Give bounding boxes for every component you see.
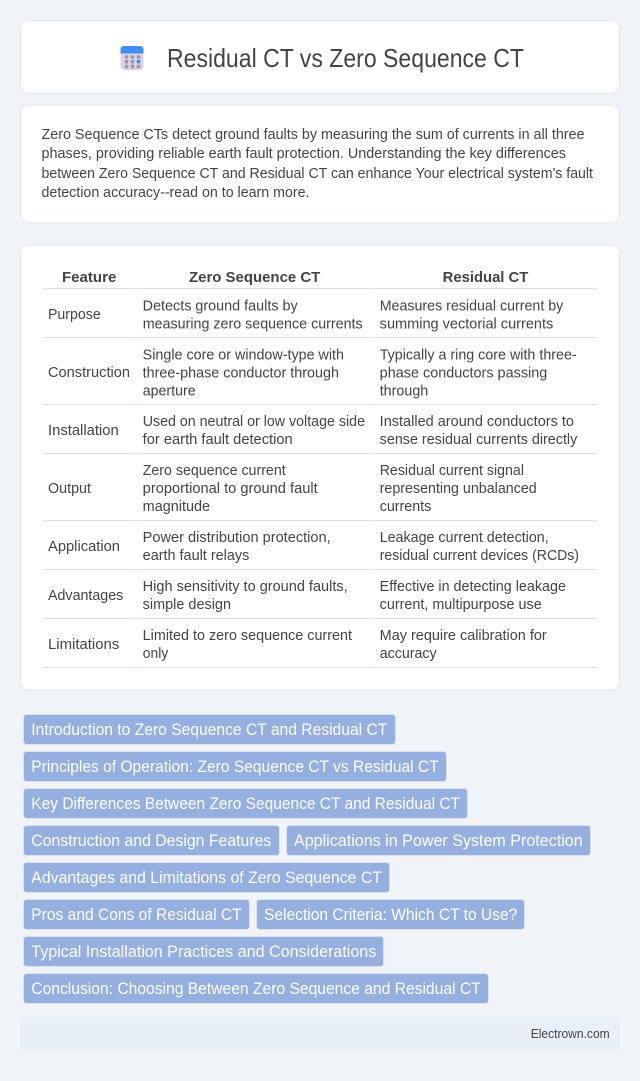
footer brand text: Electrown.com: [531, 1026, 610, 1041]
table row: application: earth fault relays: [143, 548, 249, 564]
button: applications: [286, 826, 590, 856]
table row: output: proportional to ground fault: [143, 481, 318, 497]
button: typical installation: [24, 936, 384, 966]
table row: construction: phase conductors passing: [380, 366, 547, 382]
table row: installation: Used on neutral or low voltage side: [143, 414, 365, 430]
text block: introduction paragraph: Zero Sequence CTs detect ground faults by measuring the sum of currents in all three: [42, 127, 584, 143]
table row: advantages: simple design: [143, 597, 231, 613]
button: pros and cons: Pros and Cons of Residual CT: [31, 906, 242, 924]
table row: output: Output: [48, 481, 91, 497]
table row: application: [43, 530, 597, 570]
panel: introduction: [20, 105, 620, 223]
table row: purpose: Measures residual current by: [380, 298, 564, 314]
table row: application: Application: [48, 539, 120, 555]
button: advantages and limitations: [24, 862, 390, 892]
button: introduction: Introduction to Zero Sequence CT and Residual CT: [31, 721, 387, 739]
table row: installation: for earth fault detection: [143, 432, 293, 448]
table row: advantages: Effective in detecting leakage: [380, 579, 566, 595]
table row: limitations: [43, 628, 597, 668]
table row: construction: through: [380, 384, 428, 400]
button: typical installation: Typical Installation Practices and Considerations: [31, 943, 376, 961]
table row: limitations: accuracy: [380, 646, 438, 662]
table header row: [43, 270, 597, 289]
table row: purpose: Detects ground faults by: [143, 298, 299, 314]
text block: introduction paragraph: between Zero Sequence CT and Residual CT can enhance Your electrical system's fault: [42, 166, 593, 182]
table row: purpose: [43, 298, 597, 338]
table row: application: Power distribution protection,: [143, 530, 331, 546]
table row: installation: [43, 414, 597, 454]
table row: installation: Installation: [48, 423, 119, 439]
title: Residual CT vs Zero Sequence CT: [167, 45, 524, 73]
table row: construction: [43, 348, 597, 405]
topic link buttons: [24, 714, 590, 1004]
button: construction and design: Construction and Design Features: [31, 832, 271, 850]
table row: advantages: current, multipurpose use: [380, 597, 542, 613]
panel: comparison table: [20, 245, 620, 690]
table row: application: Leakage current detection,: [380, 530, 549, 546]
footer: [20, 1017, 620, 1051]
table row: construction: Construction: [48, 365, 130, 381]
text block: introduction paragraph: phases, providing reliable earth fault protection. Understanding the key differences: [42, 146, 566, 162]
table header row: Zero Sequence CT: [189, 270, 320, 286]
table row: purpose: Purpose: [48, 307, 101, 323]
table header row: Residual CT: [443, 270, 528, 286]
table header row: Feature: [62, 270, 116, 286]
table row: output: currents: [380, 499, 431, 515]
button: advantages and limitations: Advantages and Limitations of Zero Sequence CT: [31, 869, 382, 887]
table row: construction: Typically a ring core with three-: [380, 348, 577, 364]
table row: application: residual current devices (RCDs): [380, 548, 579, 564]
table row: output: representing unbalanced: [380, 481, 537, 497]
button: key differences: Key Differences Between Zero Sequence CT and Residual CT: [31, 795, 460, 813]
table row: limitations: only: [143, 646, 169, 662]
table row: installation: Installed around conductors to: [380, 414, 574, 430]
button: applications: Applications in Power System Protection: [294, 832, 583, 850]
table row: purpose: summing vectorial currents: [380, 316, 553, 332]
table row: output: Zero sequence current: [143, 463, 286, 479]
button: principles of operation: [24, 752, 446, 782]
table row: purpose: measuring zero sequence currents: [143, 316, 363, 332]
button: conclusion: [24, 974, 488, 1004]
table row: limitations: May require calibration for: [380, 628, 547, 644]
button: selection criteria: Selection Criteria: Which CT to Use?: [264, 906, 517, 924]
button: pros and cons: [24, 900, 250, 930]
table row: construction: aperture: [143, 384, 196, 400]
table row: construction: three-phase conductor through: [143, 366, 339, 382]
button: principles of operation: Principles of Operation: Zero Sequence CT vs Residual CT: [31, 758, 439, 776]
button: key differences: [24, 788, 468, 818]
table row: limitations: Limitations: [48, 637, 119, 653]
table row: advantages: [43, 579, 597, 619]
table row: advantages: High sensitivity to ground faults,: [143, 579, 348, 595]
table row: limitations: Limited to zero sequence current: [143, 628, 352, 644]
table row: installation: sense residual currents directly: [380, 432, 578, 448]
button: construction and design: [24, 826, 280, 856]
button: conclusion: Conclusion: Choosing Between Zero Sequence and Residual CT: [31, 980, 481, 998]
icon: calendar grid: [120, 46, 144, 70]
table row: output: Residual current signal: [380, 463, 524, 479]
table row: output: [43, 463, 597, 521]
table row: construction: Single core or window-type with: [143, 348, 344, 364]
table row: advantages: Advantages: [48, 588, 123, 604]
table row: output: magnitude: [143, 499, 210, 515]
text block: introduction paragraph: [42, 127, 593, 201]
button: introduction: [24, 714, 396, 744]
button: selection criteria: [256, 900, 524, 930]
text block: introduction paragraph: detection accuracy--read on to learn more.: [42, 185, 310, 201]
panel: title header: [20, 20, 620, 93]
